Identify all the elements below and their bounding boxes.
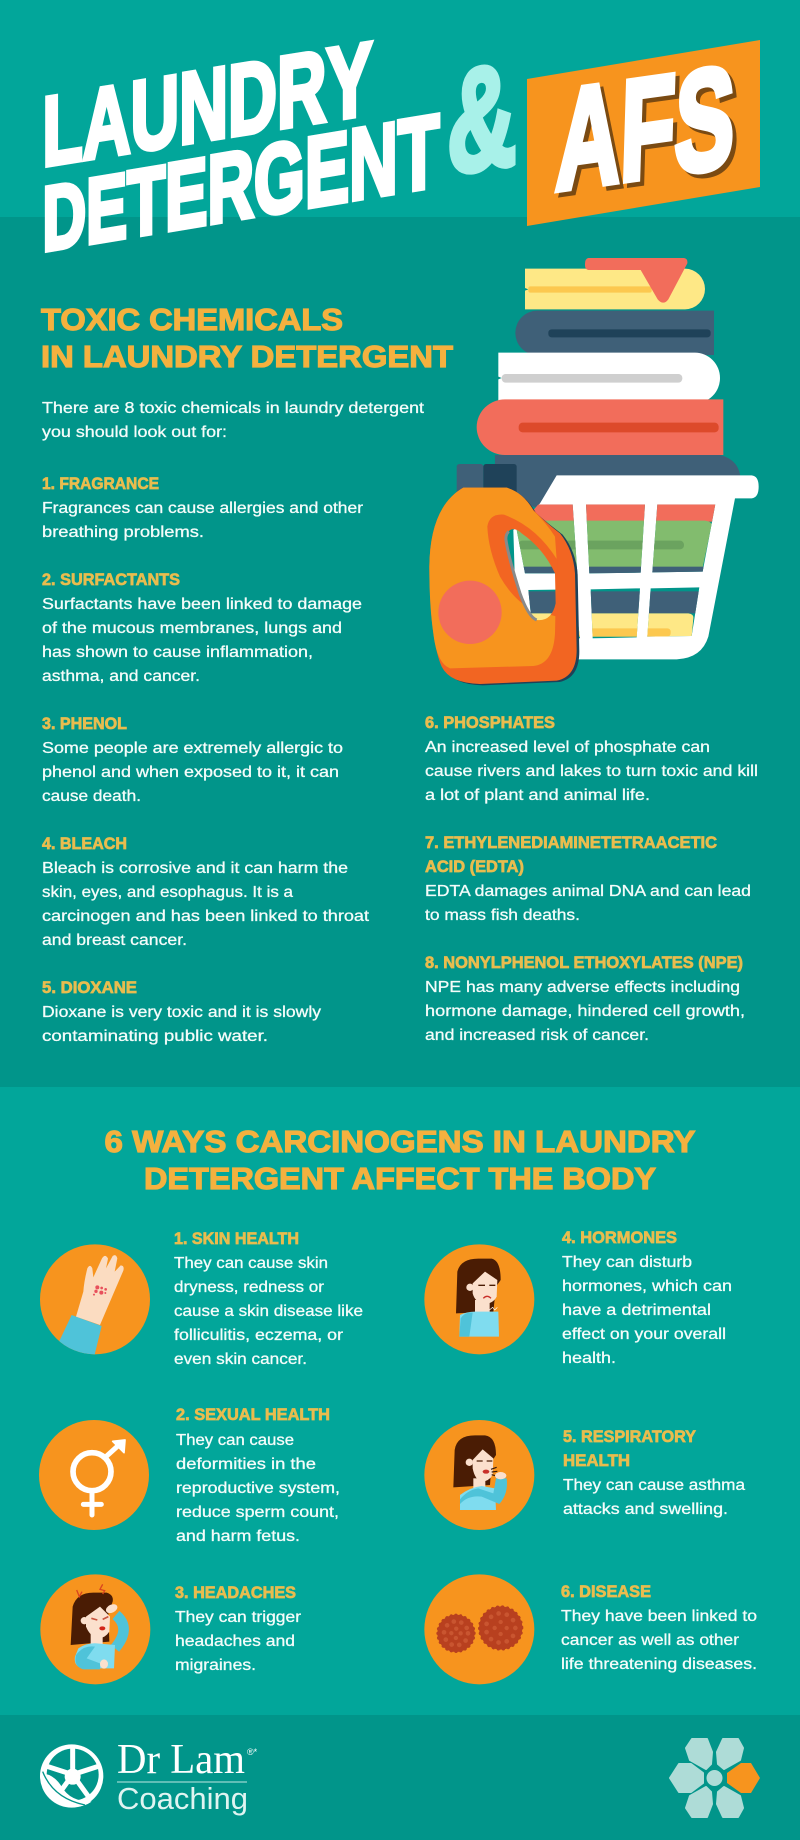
- icon: woman coughing: [424, 1420, 534, 1530]
- text: skin health: They can cause skin: [174, 1255, 328, 1272]
- chemical 6: phosphates: An increased level of phosphate can: [425, 739, 710, 756]
- section heading: toxic chemicals: IN LAUNDRY DETERGENT: [41, 339, 453, 374]
- text: sexual health: reproductive system,: [176, 1480, 340, 1497]
- text: hormones: health.: [562, 1350, 616, 1367]
- chemical 8: NPE: and increased risk of cancer.: [425, 1027, 649, 1044]
- text: sexual health: 2. SEXUAL HEALTH: [176, 1406, 330, 1424]
- chemical 8: NPE: hormone damage, hindered cell growth,: [425, 1003, 745, 1020]
- chemical 2: surfactants: 2. SURFACTANTS: [42, 571, 180, 589]
- chemical 5: dioxane: 5. DIOXANE: [42, 979, 137, 997]
- text: headaches: They can trigger: [175, 1609, 302, 1626]
- text: disease: They have been linked to: [561, 1608, 757, 1625]
- chemical 3: phenol: phenol and when exposed to it, it can: [42, 764, 339, 781]
- folded white towel: [498, 353, 720, 403]
- title: DETERGENT: [42, 92, 440, 273]
- text: respiratory health: 5. RESPIRATORY: [563, 1428, 696, 1446]
- logo mark: Dr Lam flower: [40, 1744, 103, 1808]
- chemical 2: surfactants: Surfactants have been linked to damage: [42, 596, 362, 613]
- chemical 2: surfactants: asthma, and cancer.: [42, 668, 200, 685]
- chemical 3: phenol: [42, 715, 343, 805]
- title: [42, 20, 440, 273]
- text: disease: 6. DISEASE: [561, 1583, 651, 1601]
- text: sexual health: They can cause: [176, 1432, 294, 1449]
- text: headaches: 3. HEADACHES: [175, 1584, 296, 1602]
- text: headaches: headaches and: [175, 1633, 295, 1650]
- text: skin health: dryness, redness or: [174, 1279, 325, 1296]
- chemical 5: dioxane: [42, 979, 321, 1045]
- text: respiratory health: They can cause asthma: [563, 1477, 745, 1494]
- chemical 2: surfactants: of the mucous membranes, lungs and: [42, 620, 342, 637]
- folded navy towel: [515, 311, 714, 355]
- laundry basket: [513, 475, 759, 659]
- section heading: toxic chemicals: [41, 302, 453, 374]
- icon: woman with headache: [40, 1574, 150, 1684]
- bottle handle hole edge: [506, 531, 537, 620]
- text: hormones: effect on your overall: [562, 1326, 726, 1343]
- logo wordmark: Coaching: [117, 1781, 248, 1816]
- text: headaches: [175, 1584, 302, 1674]
- text: skin health: 1. SKIN HEALTH: [174, 1230, 299, 1248]
- icon: woman with hormone trouble: [424, 1244, 534, 1354]
- text: hormones: hormones, which can: [562, 1278, 732, 1295]
- chemical 6: phosphates: [425, 714, 758, 804]
- text: headaches: migraines.: [175, 1657, 256, 1674]
- intro text: There are 8 toxic chemicals in laundry detergent: [42, 400, 425, 417]
- intro text: [42, 400, 425, 441]
- chemical 7: EDTA: EDTA damages animal DNA and can lead: [425, 883, 751, 900]
- chemical 7: EDTA: 7. ETHYLENEDIAMINETETRAACETIC: [425, 834, 717, 852]
- title: LAUNDRY: [42, 20, 373, 188]
- icon: gender symbol: [39, 1420, 149, 1530]
- icon: cancer cells: [424, 1574, 534, 1684]
- illustration: laundry stack, basket and detergent bottle: [429, 258, 759, 685]
- section heading: toxic chemicals: TOXIC CHEMICALS: [41, 302, 343, 337]
- folded coral towel: [477, 399, 723, 455]
- text: disease: [561, 1583, 757, 1673]
- text: skin health: even skin cancer.: [174, 1351, 307, 1368]
- chemical 7: EDTA: [425, 834, 751, 924]
- chemical 2: surfactants: has shown to cause inflammation,: [42, 644, 313, 661]
- chemical 1: fragrance: 1. FRAGRANCE: [42, 475, 159, 493]
- text: skin health: cause a skin disease like: [174, 1303, 363, 1320]
- text: skin health: folliculitis, eczema, or: [174, 1327, 344, 1344]
- flower icon: [670, 1739, 760, 1817]
- text: disease: life threatening diseases.: [561, 1656, 757, 1673]
- chemical 3: phenol: Some people are extremely allergic to: [42, 740, 343, 757]
- chemical 1: fragrance: Fragrances can cause allergies and other: [42, 500, 364, 517]
- chemical 8: NPE: NPE has many adverse effects including: [425, 979, 740, 996]
- text: hormones: have a detrimental: [562, 1302, 711, 1319]
- chemical 7: EDTA: to mass fish deaths.: [425, 907, 580, 924]
- chemical 8: NPE: [425, 954, 745, 1044]
- text: sexual health: [176, 1406, 340, 1545]
- chemical 4: bleach: Bleach is corrosive and it can harm the: [42, 860, 348, 877]
- section heading: six ways: [104, 1124, 696, 1196]
- intro text: you should look out for:: [42, 424, 227, 441]
- text: respiratory health: HEALTH: [563, 1452, 630, 1470]
- logo wordmark: Dr Lam: [117, 1737, 245, 1783]
- chemical 5: dioxane: contaminating public water.: [42, 1028, 268, 1045]
- section heading: six ways: 6 WAYS CARCINOGENS IN LAUNDRY: [104, 1124, 696, 1159]
- icon: hand with rash: [40, 1244, 150, 1360]
- section heading: six ways: DETERGENT AFFECT THE BODY: [144, 1161, 656, 1196]
- logo wordmark: [117, 1737, 258, 1816]
- chemical 4: bleach: [42, 835, 370, 949]
- text: hormones: They can disturb: [562, 1254, 692, 1271]
- text: hormones: 4. HORMONES: [562, 1229, 677, 1247]
- chemical 3: phenol: 3. PHENOL: [42, 715, 127, 733]
- chemical 4: bleach: carcinogen and has been linked to throat: [42, 908, 370, 925]
- chemical 1: fragrance: [42, 475, 364, 541]
- chemical 4: bleach: 4. BLEACH: [42, 835, 127, 853]
- chemical 2: surfactants: [42, 571, 362, 685]
- navy clothing behind basket: [495, 455, 741, 510]
- text: sexual health: reduce sperm count,: [176, 1504, 339, 1521]
- text: skin health: [174, 1230, 363, 1368]
- detergent bottle: [429, 464, 579, 685]
- chemical 4: bleach: skin, eyes, and esophagus. It is a: [42, 884, 293, 901]
- text: respiratory health: attacks and swelling.: [563, 1501, 728, 1518]
- AFS badge: [527, 37, 760, 226]
- chemical 6: phosphates: 6. PHOSPHATES: [425, 714, 555, 732]
- chemical 5: dioxane: Dioxane is very toxic and it is slowly: [42, 1004, 321, 1021]
- folded yellow towel: [525, 258, 705, 309]
- logo wordmark: ®*: [247, 1747, 258, 1757]
- text: disease: cancer as well as other: [561, 1632, 740, 1649]
- text: hormones: [562, 1229, 732, 1367]
- chemical 1: fragrance: breathing problems.: [42, 524, 204, 541]
- text: respiratory health: [563, 1428, 745, 1518]
- chemical 3: phenol: cause death.: [42, 788, 141, 805]
- chemical 6: phosphates: a lot of plant and animal life.: [425, 787, 650, 804]
- chemical 6: phosphates: cause rivers and lakes to turn toxic and kill: [425, 763, 758, 780]
- text: sexual health: deformities in the: [176, 1456, 316, 1473]
- chemical 7: EDTA: ACID (EDTA): [425, 858, 524, 876]
- ampersand: &: [447, 33, 517, 206]
- text: sexual health: and harm fetus.: [176, 1528, 300, 1545]
- chemical 8: NPE: 8. NONYLPHENOL ETHOXYLATES (NPE): [425, 954, 743, 972]
- chemical 4: bleach: and breast cancer.: [42, 932, 187, 949]
